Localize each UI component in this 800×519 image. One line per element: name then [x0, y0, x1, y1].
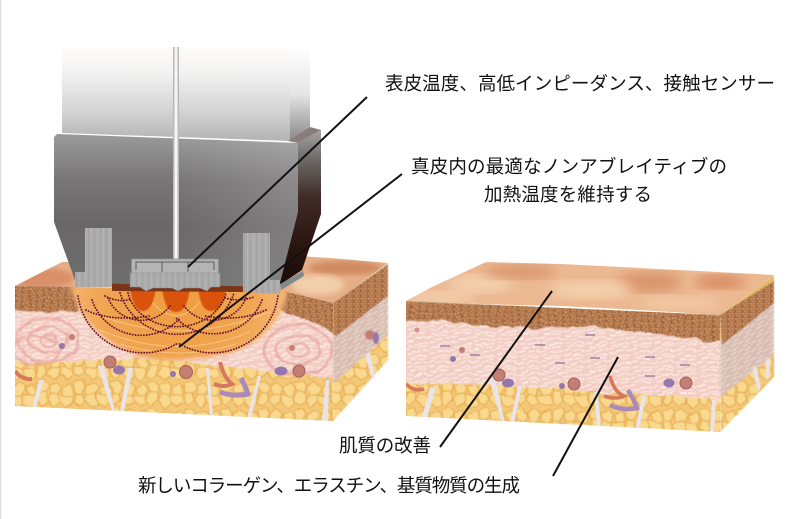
- front cross-section: [406, 301, 720, 432]
- blood vessels: [15, 334, 305, 395]
- base ledge: [280, 271, 304, 290]
- dermis layer: [15, 286, 333, 379]
- leader line: skin texture: [440, 291, 552, 447]
- collagen swirl left: [12, 318, 78, 364]
- heat spots: [130, 291, 226, 312]
- front cross-section: [15, 286, 333, 421]
- label: dermis heating: 加熱温度を維持する: [484, 184, 652, 205]
- left electrode: [75, 228, 112, 287]
- dotted ultrasound arcs: [78, 293, 278, 353]
- heated zone: [70, 285, 288, 360]
- collagen swirl right: [264, 325, 332, 375]
- vessels and cells: [406, 328, 692, 409]
- upper housing: [62, 47, 310, 141]
- dark contact strip: [112, 280, 243, 292]
- leader line: new collagen: [553, 357, 618, 476]
- label: sensors: 表皮温度、高低インピーダンス、接触センサー: [385, 73, 775, 94]
- label: new collagen and elastin: 新しいコラーゲン、エラスチン、基質物質の生成: [138, 475, 520, 496]
- centre stripe: [173, 47, 179, 273]
- label: dermis heating: 真皮内の最適なノンアブレイティブの: [411, 156, 727, 177]
- label: dermis heating: [411, 156, 727, 205]
- epidermis layer right: [279, 290, 333, 334]
- page edge line: [0, 0, 1, 519]
- white strands in fat: [32, 366, 329, 421]
- lower housing top bevel: [288, 127, 321, 143]
- label: skin texture improvement: 肌質の改善: [339, 435, 431, 456]
- right skin block: [406, 262, 775, 432]
- sensor block: [130, 259, 220, 291]
- fat layer: [15, 357, 333, 421]
- right electrode: [243, 233, 280, 294]
- skin surface behind device: [15, 256, 388, 303]
- dermis layer: [406, 310, 720, 402]
- white strands in fat: [422, 378, 716, 432]
- right side face: [333, 264, 388, 421]
- heat fibres: [86, 300, 270, 353]
- epidermis layer left: [15, 286, 79, 314]
- epidermis layer: [406, 301, 720, 344]
- fat layer: [406, 382, 720, 432]
- lower housing front: [54, 134, 298, 287]
- skin surface: [406, 262, 774, 315]
- lower housing side: [276, 130, 321, 284]
- epidermis highlight: [406, 301, 720, 315]
- leader line: sensors: [188, 97, 367, 267]
- left skin block: [15, 256, 389, 422]
- leader line: dermis heating: [179, 174, 402, 347]
- right side face: [720, 275, 774, 432]
- device: applicator head: [54, 47, 321, 294]
